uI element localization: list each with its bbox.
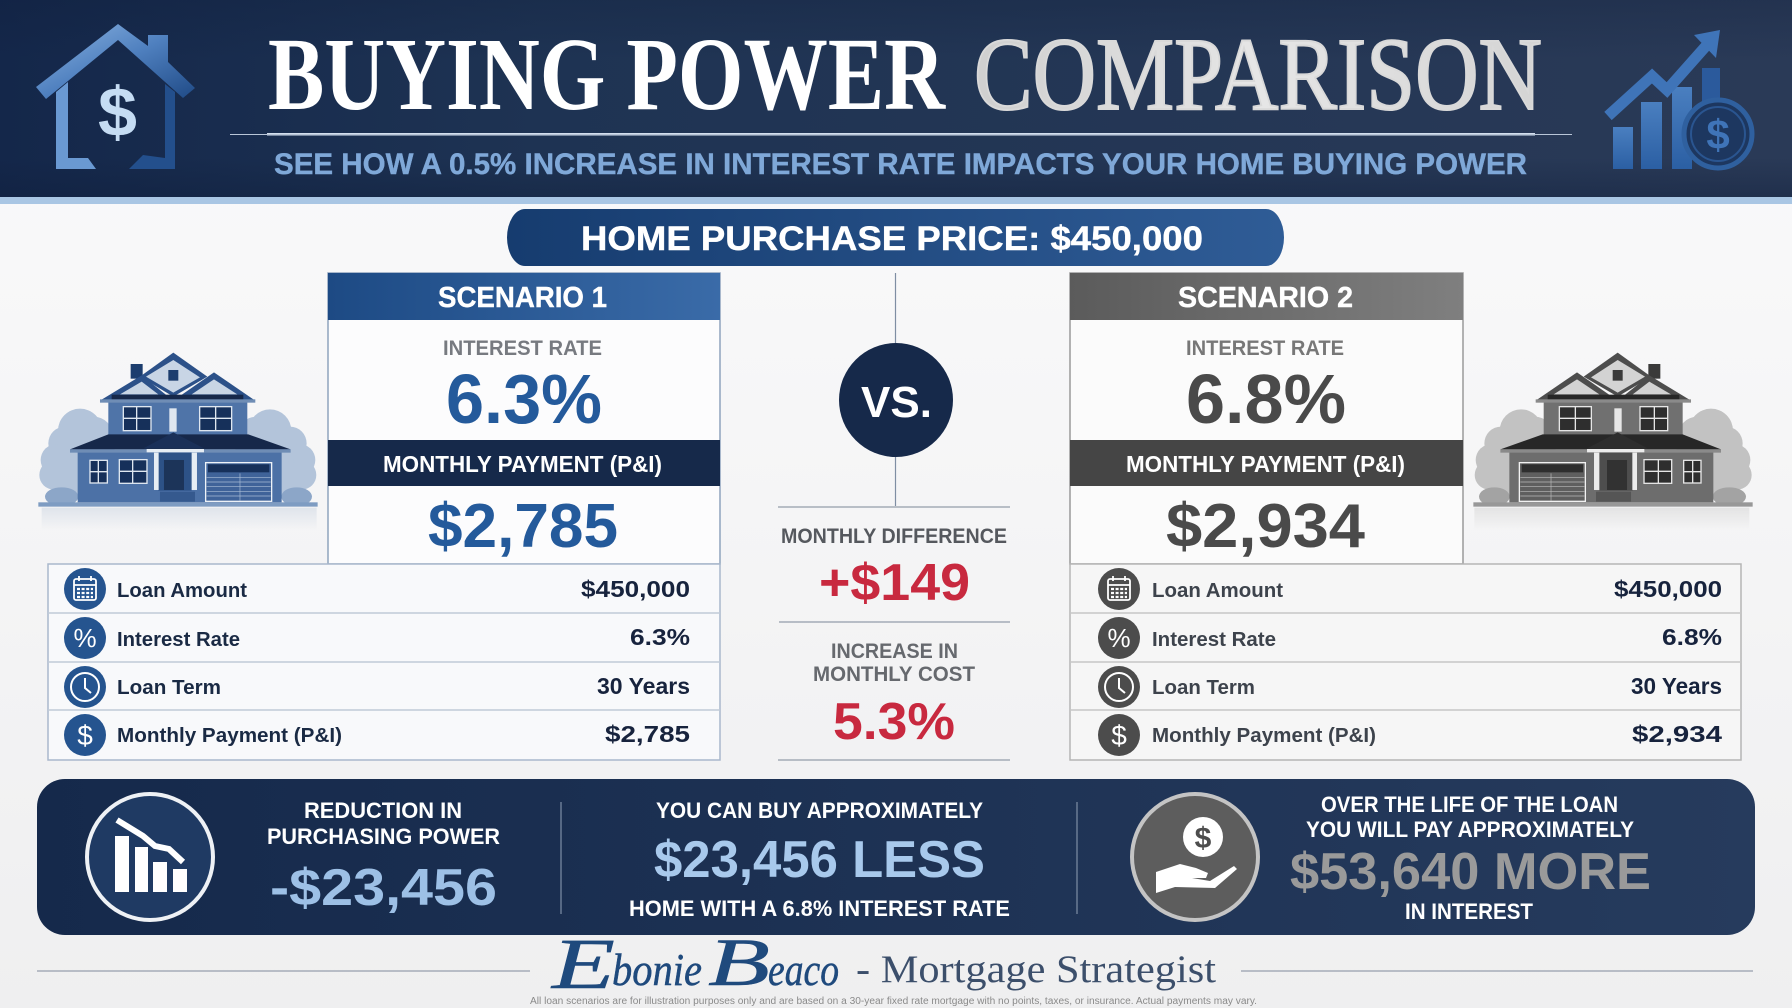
job title: - Mortgage Strategist <box>856 948 1216 991</box>
row: interest rate <box>1098 617 1722 659</box>
stat: buy less: $23,456 LESS <box>654 831 985 889</box>
signature: bonie <box>612 944 702 995</box>
scenario 2 heading: SCENARIO 2 <box>1178 282 1353 314</box>
row: loan term: 30 Years <box>597 673 690 699</box>
title <box>268 17 1542 132</box>
row: monthly payment: $2,934 <box>1632 721 1722 747</box>
home purchase price pill <box>507 209 1284 266</box>
row: interest rate <box>64 617 690 659</box>
row: loan term: Loan Term <box>117 677 221 699</box>
stat: reduction in purchasing power: REDUCTION IN <box>304 798 462 823</box>
stat: pay more interest: YOU WILL PAY APPROXIMATELY <box>1306 817 1634 842</box>
house illustration: blue <box>38 353 318 530</box>
monthly payment bar <box>328 440 720 486</box>
monthly payment bar: MONTHLY PAYMENT (P&I) <box>383 451 662 477</box>
panel: scenario 1 <box>328 273 720 564</box>
title: COMPARISON <box>974 17 1542 132</box>
center column: monthly difference <box>778 507 1010 612</box>
row: monthly payment <box>1098 714 1722 756</box>
stat: reduction in purchasing power: -$23,456 <box>270 859 497 917</box>
interest rate value: 6.3% <box>446 360 602 438</box>
interest rate label: INTEREST RATE <box>1186 337 1344 360</box>
center column: increase in monthly cost: MONTHLY COST <box>813 663 975 686</box>
stat: pay more interest <box>1290 792 1651 924</box>
stat: pay more interest: IN INTEREST <box>1405 899 1534 924</box>
center column: monthly difference: +$149 <box>819 554 970 612</box>
center column: versus badge: VS. <box>861 378 932 427</box>
row: loan amount <box>1098 568 1722 610</box>
row: loan amount: $450,000 <box>581 576 690 602</box>
stat: pay more interest: $53,640 MORE <box>1290 843 1651 901</box>
table: scenario 2 details <box>1070 564 1741 760</box>
icon: house with dollar sign: $ <box>98 73 137 151</box>
row: interest rate: % <box>73 623 97 653</box>
stat: buy less <box>629 798 1010 921</box>
icon: rising chart with coin: $ <box>1706 111 1730 158</box>
header banner <box>0 0 1792 204</box>
scenario 1 heading: SCENARIO 1 <box>438 282 607 314</box>
disclaimer: All loan scenarios are for illustration purposes only and are based on a 30-year fixed rate mortgage with no points, taxes, or insurance. Actual payments may vary. <box>530 996 1257 1007</box>
icon: hand holding coin <box>1132 794 1258 920</box>
stat: reduction in purchasing power <box>267 798 500 917</box>
row: loan amount: Loan Amount <box>1152 580 1283 602</box>
house illustration: grey <box>1473 353 1753 530</box>
icon: hand holding coin: $ <box>1195 822 1212 855</box>
stat: reduction in purchasing power: PURCHASING POWER <box>267 824 500 849</box>
panel: scenario 2 <box>1070 273 1463 564</box>
row: loan amount: $450,000 <box>1614 576 1722 602</box>
monthly payment bar <box>1070 440 1463 486</box>
signature: B <box>708 924 770 1000</box>
table: scenario 1 details <box>48 564 720 760</box>
icon: rising chart with coin <box>1608 30 1752 169</box>
title: BUYING POWER <box>268 17 947 132</box>
icon: house with dollar sign <box>36 24 195 169</box>
center column: increase in monthly cost: INCREASE IN <box>831 640 958 663</box>
home purchase price pill: HOME PURCHASE PRICE: $450,000 <box>581 220 1203 258</box>
row: monthly payment: Monthly Payment (P&I) <box>1152 725 1376 747</box>
center column: monthly difference: MONTHLY DIFFERENCE <box>781 525 1007 548</box>
row: loan amount <box>64 568 690 610</box>
row: monthly payment: $ <box>1111 720 1127 751</box>
row: interest rate: 6.8% <box>1662 624 1722 650</box>
stat: buy less: YOU CAN BUY APPROXIMATELY <box>656 798 983 823</box>
row: loan term <box>64 666 690 708</box>
row: interest rate: % <box>1107 623 1131 653</box>
signature: eaco <box>768 944 839 995</box>
center column: increase in monthly cost <box>778 622 1010 760</box>
monthly payment value: $2,785 <box>428 492 618 561</box>
row: loan term: Loan Term <box>1152 677 1255 699</box>
row: loan term <box>1098 666 1722 708</box>
row: loan amount: Loan Amount <box>117 580 247 602</box>
icon: declining bars <box>87 794 213 920</box>
center column: versus badge <box>839 273 953 506</box>
subtitle: SEE HOW A 0.5% INCREASE IN INTEREST RATE IMPACTS YOUR HOME BUYING POWER <box>274 148 1527 181</box>
row: monthly payment: $ <box>77 720 93 751</box>
row: monthly payment <box>64 714 690 756</box>
panel: bottom summary <box>37 779 1755 935</box>
row: interest rate: Interest Rate <box>1152 629 1276 651</box>
footer <box>37 924 1753 1007</box>
signature: E <box>551 924 615 1004</box>
center column: increase in monthly cost: 5.3% <box>833 693 955 751</box>
row: monthly payment: Monthly Payment (P&I) <box>117 725 342 747</box>
signature <box>551 924 839 1004</box>
row: interest rate: 6.3% <box>630 624 690 650</box>
interest rate label: INTEREST RATE <box>443 337 602 360</box>
stat: buy less: HOME WITH A 6.8% INTEREST RATE <box>629 896 1010 921</box>
row: monthly payment: $2,785 <box>605 721 690 747</box>
scenario 1 heading <box>328 273 720 320</box>
interest rate value: 6.8% <box>1186 360 1346 438</box>
scenario 2 heading <box>1070 273 1463 320</box>
row: loan term: 30 Years <box>1631 673 1722 699</box>
stat: pay more interest: OVER THE LIFE OF THE LOAN <box>1321 792 1618 817</box>
row: interest rate: Interest Rate <box>117 629 240 651</box>
monthly payment value: $2,934 <box>1166 492 1366 561</box>
monthly payment bar: MONTHLY PAYMENT (P&I) <box>1126 451 1405 477</box>
